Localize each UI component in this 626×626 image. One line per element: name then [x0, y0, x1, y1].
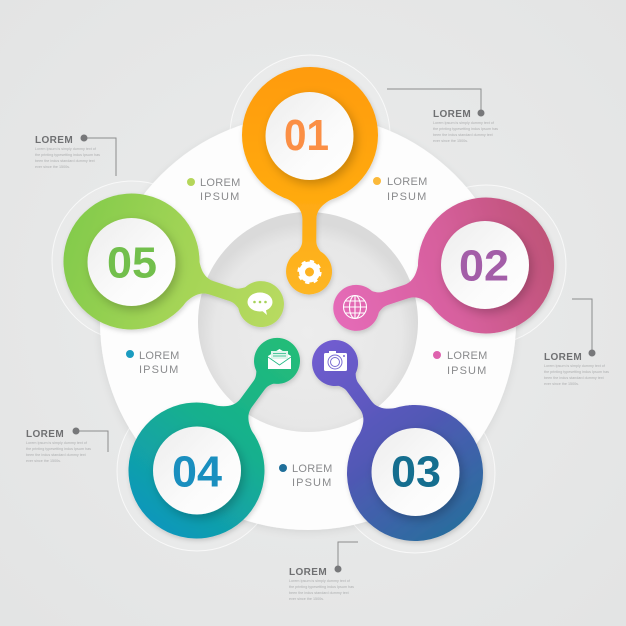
callout: top right: the printing typesetting indus Ipsum has: [433, 127, 498, 131]
step 04: teal pin: [101, 302, 345, 566]
callout: lower left: LOREM: [26, 429, 64, 440]
callout: top left: been the indus standard dummy text: [35, 159, 95, 163]
ring label: upper left: LOREM: [200, 177, 241, 189]
number 02: 02: [459, 242, 509, 290]
ring label: right: [433, 350, 488, 377]
callout: right: [544, 299, 609, 386]
ring label: right: LOREM: [447, 350, 488, 362]
icon: open envelope: [268, 349, 291, 369]
callout: right: Lorem Ipsum is simply dummy text of: [544, 364, 606, 368]
callout: bottom: LOREM: [289, 567, 327, 578]
callout: top left: [35, 134, 116, 176]
number 05: 05: [107, 238, 157, 288]
ring label: upper right: [373, 176, 428, 203]
ring label: bottom: IPSUM: [292, 477, 332, 489]
callout: right: been the indus standard dummy text: [544, 376, 604, 380]
halo: step 04: [117, 391, 277, 551]
ring label: upper left: IPSUM: [200, 191, 240, 203]
icon: gear: [299, 261, 320, 283]
callout: top left: Lorem Ipsum is simply dummy text of: [35, 147, 97, 151]
halo: step 01: [230, 55, 390, 215]
callout: bottom: [289, 542, 358, 601]
ring label: right: IPSUM: [447, 365, 487, 377]
white ring: [100, 114, 516, 530]
callout: top left: the printing typesetting indus Ipsum has: [35, 153, 100, 157]
ring label: bottom: LOREM: [292, 463, 333, 475]
number 04: 04: [172, 448, 223, 496]
number 01: 01: [284, 111, 329, 160]
callout: top right: [387, 89, 498, 143]
ring label: left: [126, 350, 180, 376]
callout: top right: LOREM: [433, 109, 471, 120]
ring label: left: IPSUM: [139, 364, 179, 376]
callout: lower left: [26, 428, 108, 463]
step 02: pink pin: [313, 180, 572, 380]
callout: right: ever since the 1500s.: [544, 382, 579, 386]
callout: bottom: been the indus standard dummy text: [289, 591, 349, 595]
callout: top left: ever since the 1500s.: [35, 165, 70, 169]
step 05: green pin: [46, 176, 304, 376]
callout: lower left: the printing typesetting indus Ipsum has: [26, 447, 91, 451]
ring label: upper left: [187, 177, 241, 203]
icon: globe: [344, 296, 366, 318]
callout: bottom: the printing typesetting indus Ipsum has: [289, 585, 354, 589]
ring label: upper right: IPSUM: [387, 191, 427, 203]
number 03: 03: [391, 448, 441, 496]
callout: lower left: Lorem Ipsum is simply dummy text of: [26, 441, 88, 445]
callout: right: LOREM: [544, 352, 582, 363]
step 03: blue pin: [267, 304, 510, 568]
callout: bottom: ever since the 1500s.: [289, 597, 324, 601]
ring label: left: LOREM: [139, 350, 180, 362]
icon: camera: [324, 351, 347, 371]
callout: top left: LOREM: [35, 135, 73, 146]
callout: top right: ever since the 1500s.: [433, 139, 468, 143]
ring label: upper right: LOREM: [387, 176, 428, 188]
icon: speech bubble: [248, 292, 272, 315]
callout: lower left: been the indus standard dummy text: [26, 453, 86, 457]
halo: step 02: [406, 185, 566, 345]
callout: top right: been the indus standard dummy text: [433, 133, 493, 137]
step 01: orange pin: [241, 67, 378, 295]
halo: step 05: [52, 181, 212, 341]
halo: step 03: [335, 393, 495, 553]
ring label: bottom: [279, 463, 333, 489]
callout: lower left: ever since the 1500s.: [26, 459, 61, 463]
callout: bottom: Lorem Ipsum is simply dummy text of: [289, 579, 351, 583]
callout: right: the printing typesetting indus Ipsum has: [544, 370, 609, 374]
callout: top right: Lorem Ipsum is simply dummy text of: [433, 121, 495, 125]
